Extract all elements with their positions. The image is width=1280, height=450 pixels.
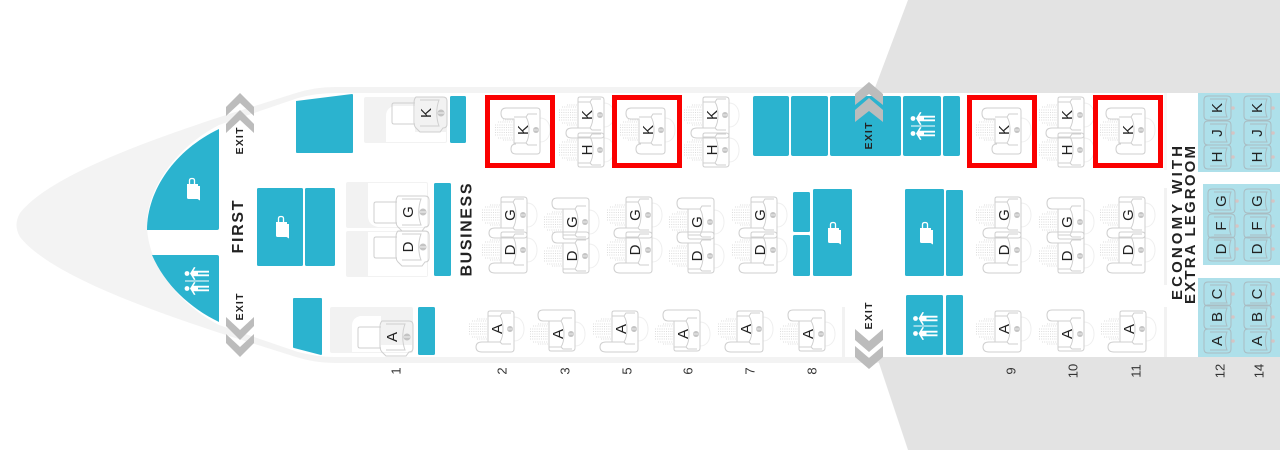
seats: row 6: G bbox=[689, 216, 706, 228]
seats: row 7 bbox=[718, 197, 787, 352]
panel: economy DFG bbox=[1203, 184, 1280, 265]
row numbers: 6 bbox=[680, 367, 696, 375]
seat pod: 1D: D bbox=[400, 241, 417, 252]
row numbers: 5 bbox=[620, 367, 634, 375]
row numbers: 11 bbox=[1128, 364, 1144, 378]
seats: row 10: H bbox=[1059, 145, 1076, 155]
icon: lavatory bbox=[911, 112, 935, 140]
seats: row 5: G bbox=[627, 209, 644, 221]
icon: luggage bbox=[276, 216, 289, 238]
panel: first class front lavatory bbox=[152, 255, 219, 322]
seats: row 9: A bbox=[996, 324, 1013, 334]
panel: economy HJK: J bbox=[1209, 129, 1226, 137]
heading: economy with extra legroom bbox=[1169, 146, 1199, 304]
seats: row 5 bbox=[593, 108, 675, 352]
panel: mid galley left bbox=[793, 189, 852, 276]
panel: economy DFG: G bbox=[1249, 195, 1266, 207]
seats: row 7: A bbox=[738, 324, 755, 334]
seats: row 3: H bbox=[579, 145, 596, 155]
panel: economy HJK: J bbox=[1249, 129, 1266, 137]
seats: row 2: K bbox=[515, 125, 532, 135]
seats: row 11 bbox=[1100, 108, 1156, 352]
seats: row 11: G bbox=[1120, 209, 1137, 221]
seats: row 7: D bbox=[752, 244, 769, 255]
exit bottom left bbox=[226, 293, 254, 357]
seats: row 10: A bbox=[1059, 329, 1076, 339]
panel: first class front galley bbox=[147, 129, 219, 230]
row numbers: 10 bbox=[1066, 364, 1080, 378]
seats: row 6: D bbox=[689, 250, 706, 261]
seats: row 8 bbox=[780, 310, 835, 351]
seats: row 9 bbox=[976, 108, 1031, 352]
seats: row 9: D bbox=[996, 244, 1013, 255]
seats: row 3: G bbox=[564, 216, 581, 228]
seat pod: 1G bbox=[346, 182, 429, 231]
panel: economy ABC: C bbox=[1249, 288, 1266, 299]
wings bbox=[873, 0, 1280, 450]
icon: luggage bbox=[187, 178, 200, 200]
seats: row 6: H bbox=[704, 145, 721, 155]
panel: economy ABC: B bbox=[1249, 312, 1266, 322]
seat pod: 1K: K bbox=[418, 108, 435, 118]
seat pod: 1D bbox=[346, 231, 429, 277]
panel: economy ABC: A bbox=[1209, 336, 1226, 346]
galley top bbox=[296, 94, 353, 153]
icon: luggage bbox=[920, 222, 933, 244]
exit top centre bbox=[855, 82, 883, 150]
row numbers: 8 bbox=[804, 367, 820, 375]
seat pod: 1G: G bbox=[400, 206, 417, 218]
panel: economy HJK: H bbox=[1209, 152, 1226, 162]
panel: economy DFG: F bbox=[1249, 221, 1266, 231]
seats: row 3: K bbox=[579, 110, 596, 120]
icon: lavatory bbox=[913, 312, 938, 340]
panel: lavatory lower bbox=[906, 295, 963, 355]
heading: business: BUSINESS bbox=[458, 183, 476, 276]
seats: row 7: G bbox=[752, 209, 769, 221]
seats: row 9: G bbox=[996, 209, 1013, 221]
row numbers: 12 bbox=[1212, 364, 1228, 378]
seats: row 11: A bbox=[1121, 324, 1138, 334]
row numbers: 14 bbox=[1252, 364, 1266, 378]
panel: mid galleys top bbox=[753, 96, 960, 156]
partition: centre bulkhead bbox=[434, 183, 451, 276]
seats: row 2: D bbox=[502, 244, 519, 255]
icon: luggage bbox=[828, 222, 841, 244]
panel: economy DFG: G bbox=[1213, 195, 1230, 207]
seats: row 6: A bbox=[675, 329, 692, 339]
exit bottom centre: EXIT bbox=[863, 302, 875, 330]
seats: row 10: G bbox=[1059, 216, 1076, 228]
seat pod: 1A bbox=[330, 307, 435, 356]
panel: mid galley right bbox=[905, 189, 963, 276]
panel: economy ABC bbox=[1198, 278, 1280, 357]
icon: lavatory bbox=[185, 267, 209, 295]
seats: row 10: D bbox=[1059, 250, 1076, 261]
seats: row 5: D bbox=[627, 244, 644, 255]
seats: row 3: A bbox=[550, 329, 567, 339]
seats: row 11: K bbox=[1120, 125, 1137, 135]
seats: row 9: K bbox=[996, 125, 1013, 135]
row numbers: 3 bbox=[558, 367, 572, 375]
seats: row 2 bbox=[469, 108, 550, 352]
exit top left: EXIT bbox=[234, 127, 246, 154]
heading: first: FIRST bbox=[230, 200, 247, 254]
seats: row 2: G bbox=[502, 209, 519, 221]
seat pod: 1K bbox=[364, 96, 466, 143]
exit top left bbox=[226, 93, 254, 154]
seats: row 10: K bbox=[1059, 110, 1076, 120]
panel: economy ABC: A bbox=[1249, 336, 1266, 346]
seats: row 10 bbox=[1039, 97, 1094, 351]
exit top centre: EXIT bbox=[863, 122, 875, 150]
seats: row 3: D bbox=[564, 250, 581, 261]
panel: economy DFG: F bbox=[1213, 221, 1230, 231]
fuselage outline bbox=[16, 87, 1198, 363]
exit bottom centre bbox=[855, 302, 883, 369]
panel: economy HJK bbox=[1198, 93, 1280, 172]
seats: row 6 bbox=[655, 97, 739, 351]
seats: row 2: A bbox=[489, 324, 506, 334]
seats: row 5: A bbox=[613, 324, 630, 334]
seats: row 5: K bbox=[640, 125, 657, 135]
panel: economy HJK: K bbox=[1249, 103, 1266, 113]
row numbers bbox=[388, 364, 1266, 378]
exit bottom left: EXIT bbox=[234, 293, 246, 320]
panel: economy DFG: D bbox=[1249, 243, 1266, 254]
panel: first class centre galley bbox=[257, 188, 335, 266]
row numbers: 2 bbox=[494, 367, 510, 375]
panel: economy HJK: H bbox=[1249, 152, 1266, 162]
heading: economy with extra legroom: EXTRA LEGROOM bbox=[1182, 146, 1199, 304]
seats: row 8: A bbox=[800, 329, 817, 339]
seats: row 6: K bbox=[704, 110, 721, 120]
heading: economy with extra legroom: ECONOMY WITH bbox=[1169, 146, 1186, 300]
panel: economy ABC: B bbox=[1209, 312, 1226, 322]
row numbers: 9 bbox=[1004, 367, 1018, 375]
row numbers: 7 bbox=[742, 367, 758, 375]
highlight boxes bbox=[488, 98, 1160, 166]
seats: row 11: D bbox=[1120, 244, 1137, 255]
galley bottom bbox=[293, 298, 322, 355]
seats: row 3 bbox=[530, 97, 614, 351]
row numbers: 1 bbox=[388, 367, 404, 375]
seat pod: 1A: A bbox=[384, 332, 401, 342]
panel: economy HJK: K bbox=[1209, 103, 1226, 113]
panel: economy ABC: C bbox=[1209, 288, 1226, 299]
panel: economy DFG: D bbox=[1213, 243, 1230, 254]
